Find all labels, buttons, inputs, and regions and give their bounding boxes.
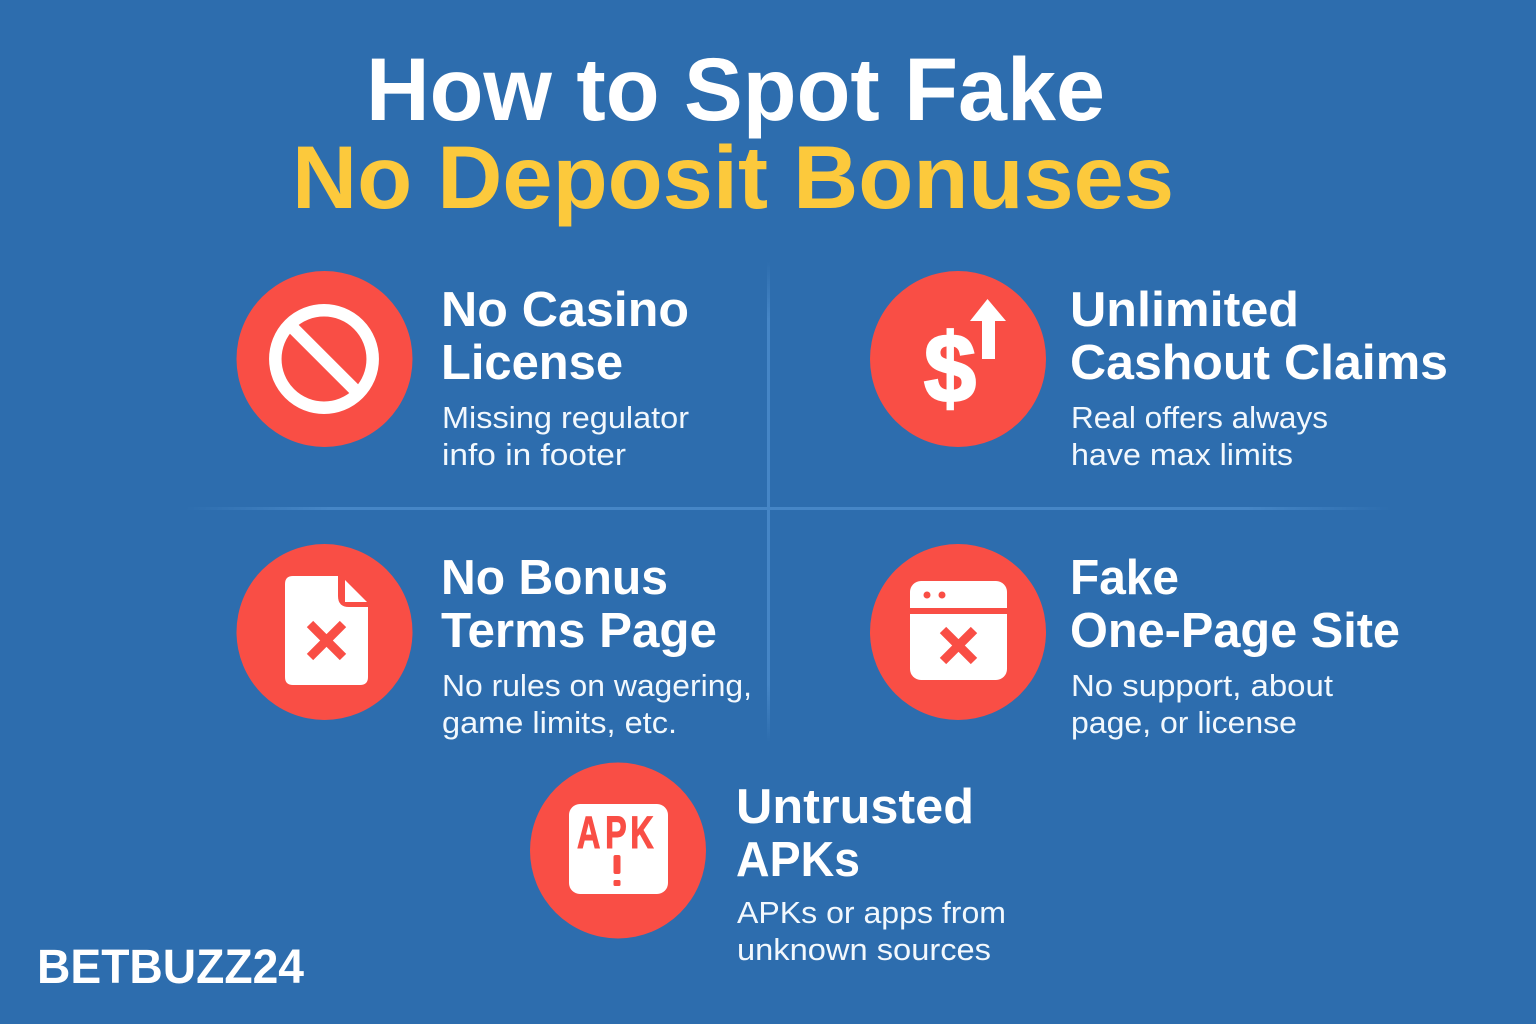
heading: No Casino bbox=[441, 283, 689, 337]
description: No rules on wagering, bbox=[442, 668, 752, 703]
description: Real offers always bbox=[1071, 400, 1328, 435]
heading: No Bonus bbox=[441, 551, 668, 605]
title: How to Spot Fake bbox=[366, 39, 1105, 139]
description: info in footer bbox=[442, 437, 626, 472]
description: game limits, etc. bbox=[442, 705, 677, 740]
heading: Untrusted bbox=[736, 780, 974, 834]
panel: no bonus terms page bbox=[236, 544, 752, 740]
title: No Deposit Bonuses bbox=[292, 127, 1174, 227]
heading: APKs bbox=[736, 833, 860, 887]
heading: Terms Page bbox=[441, 604, 717, 658]
panel: no casino license bbox=[236, 271, 689, 472]
icon: dollar with up arrow bbox=[870, 271, 1046, 447]
icon: browser window with cross bbox=[870, 544, 1046, 720]
description: page, or license bbox=[1071, 705, 1297, 740]
title bbox=[292, 39, 1174, 227]
heading: Unlimited bbox=[1070, 283, 1299, 337]
description: unknown sources bbox=[737, 932, 991, 967]
icon: apk warning bbox=[530, 762, 706, 938]
brand logo: BETBUZZ24 bbox=[37, 941, 304, 994]
panel: fake one-page site bbox=[870, 544, 1400, 740]
description: Missing regulator bbox=[442, 400, 689, 435]
icon: prohibited sign bbox=[236, 271, 412, 447]
heading: License bbox=[441, 336, 623, 390]
icon: document with cross bbox=[236, 544, 412, 720]
icon: apk warning: APK bbox=[577, 809, 654, 858]
heading: Cashout Claims bbox=[1070, 336, 1448, 390]
icon: dollar with up arrow: $ bbox=[924, 314, 976, 423]
description: APKs or apps from bbox=[737, 895, 1006, 930]
description: have max limits bbox=[1071, 437, 1293, 472]
heading: Fake bbox=[1070, 551, 1179, 605]
description: No support, about bbox=[1071, 668, 1333, 703]
panel: unlimited cashout claims bbox=[870, 271, 1448, 472]
heading: One-Page Site bbox=[1070, 604, 1400, 658]
panel: untrusted apks bbox=[530, 762, 1006, 967]
